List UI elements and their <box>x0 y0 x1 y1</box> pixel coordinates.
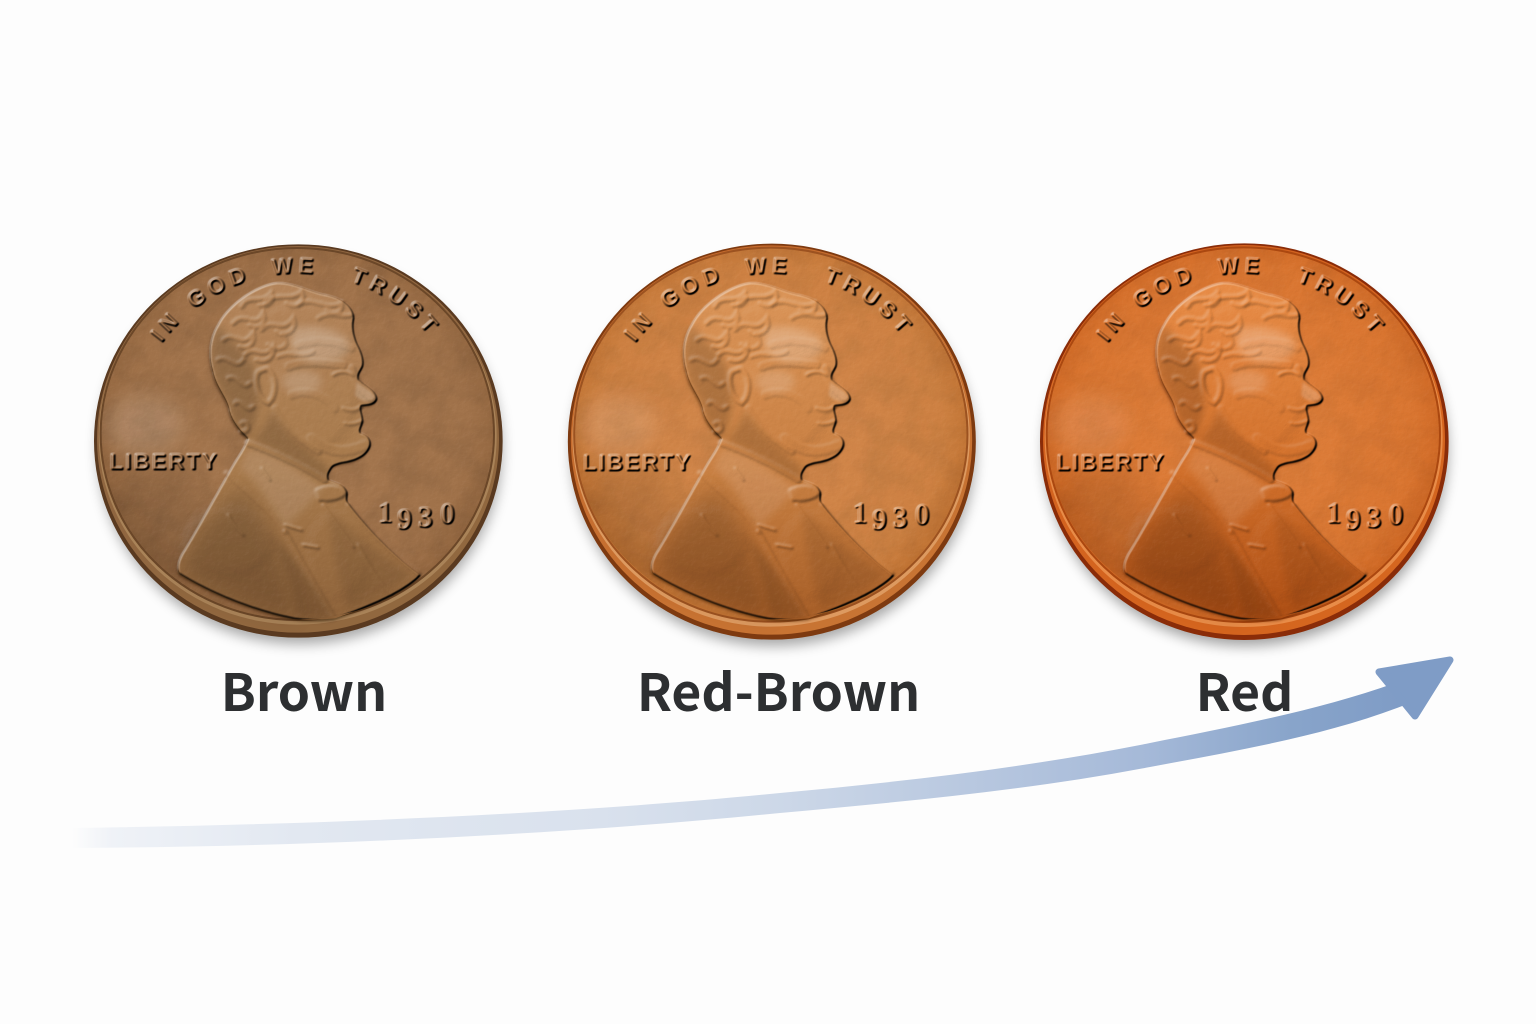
coin outer edge <box>1040 243 1449 640</box>
coin shadow <box>98 256 502 644</box>
coin rim <box>571 245 972 635</box>
portrait of Lincoln <box>177 283 420 622</box>
label: Red-Brown: Red-Brown <box>637 651 920 726</box>
liberty inscription: LIBERTY <box>1057 450 1165 475</box>
portrait of Lincoln <box>651 283 893 622</box>
coin rim <box>1043 245 1445 635</box>
coin rim highlight <box>1045 247 1443 627</box>
coin field <box>1047 247 1440 622</box>
date: 1930 <box>378 497 455 536</box>
arrow shaft <box>72 683 1410 848</box>
date: 1930 <box>1327 498 1404 537</box>
portrait of Lincoln <box>1123 283 1366 622</box>
motto: INGOD WE TRUST <box>149 256 440 344</box>
coin shadow <box>572 256 975 646</box>
coin: red-brown <box>564 244 983 654</box>
coin: brown <box>90 244 510 652</box>
coin lighting <box>1050 249 1434 584</box>
liberty inscription: LIBERTY <box>583 450 691 475</box>
coin lighting <box>576 249 962 584</box>
embossed relief and inscriptions <box>110 256 456 620</box>
coin field <box>101 248 494 620</box>
embossed relief and inscriptions <box>583 256 938 620</box>
coin rim highlight <box>572 247 970 627</box>
liberty inscription: LIBERTY <box>110 450 218 475</box>
coin rim <box>97 246 499 633</box>
label: Brown: Brown <box>221 651 387 726</box>
coin lighting <box>104 249 488 584</box>
motto: INGOD WE TRUST <box>1095 256 1386 344</box>
coin: red <box>1036 243 1456 654</box>
embossed relief and inscriptions <box>1056 256 1411 620</box>
coin outer edge <box>94 244 503 638</box>
arrow head <box>1379 660 1450 716</box>
date: 1930 <box>853 498 930 537</box>
label: Red: Red <box>1196 651 1293 726</box>
arrow: progression from brown to red <box>72 660 1450 848</box>
coin rim highlight <box>99 248 497 625</box>
coin field <box>574 248 967 622</box>
motto: INGOD WE TRUST <box>622 256 914 344</box>
coin outer edge <box>568 244 976 640</box>
coin shadow <box>1044 256 1448 646</box>
